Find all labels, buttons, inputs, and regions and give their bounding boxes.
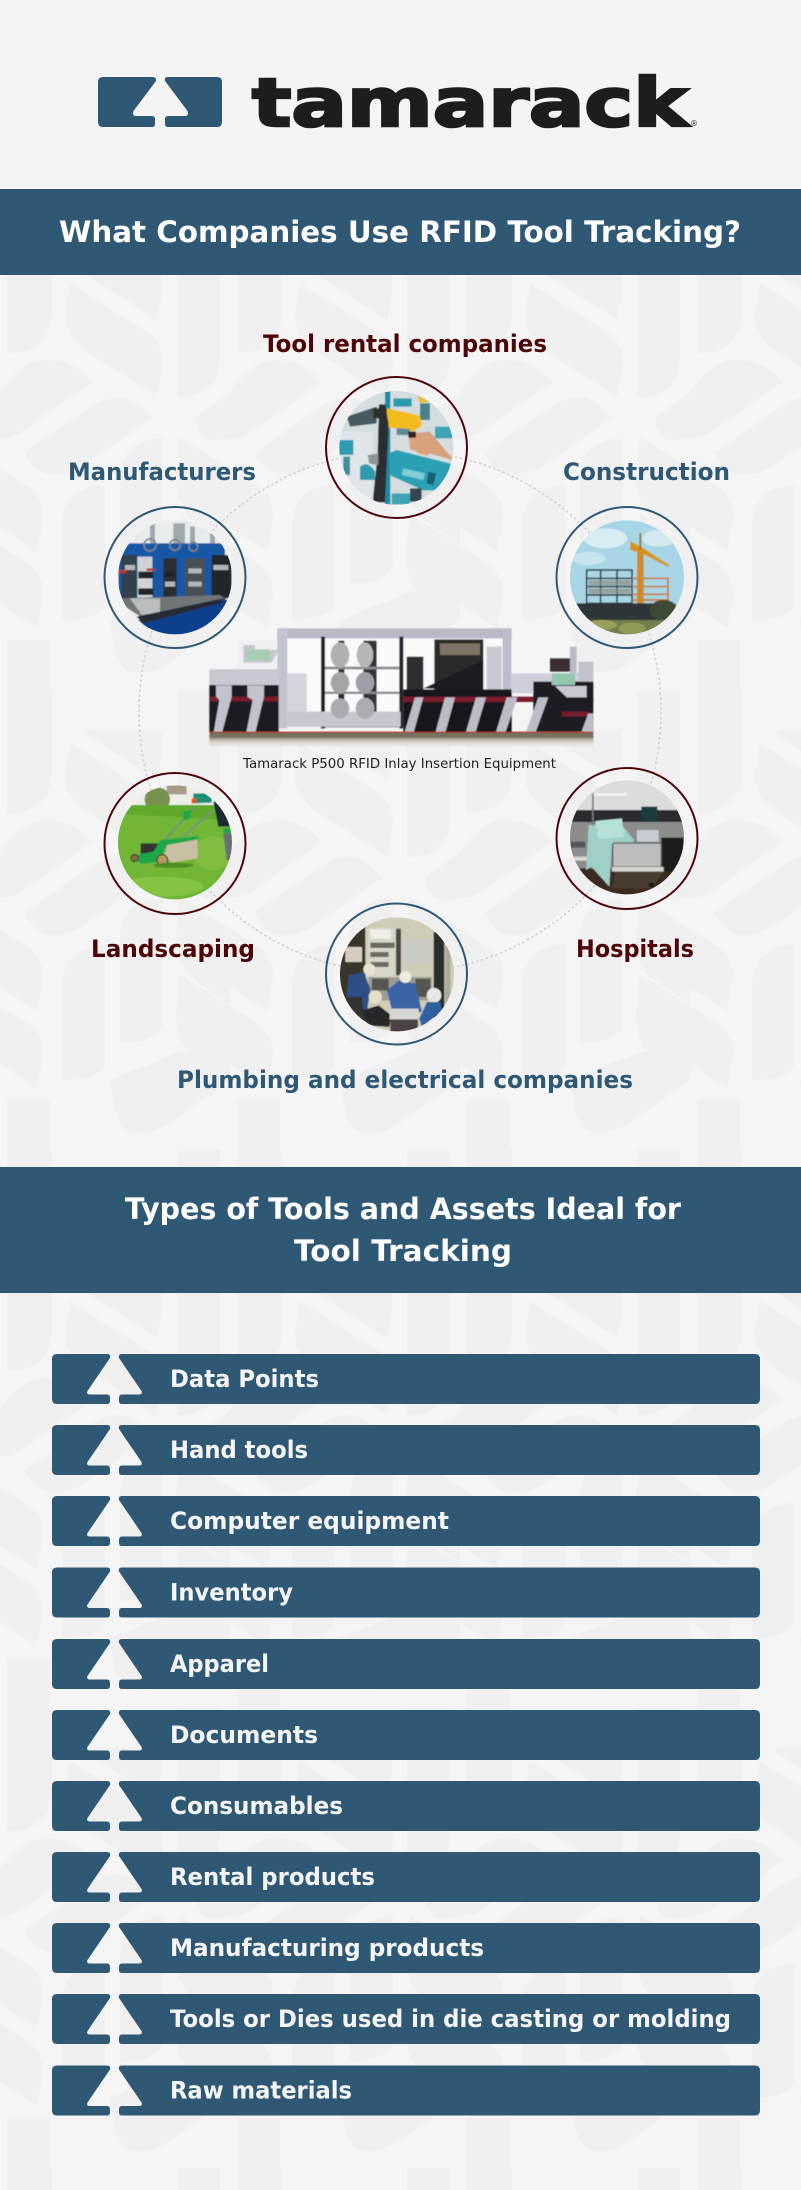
ring	[556, 768, 698, 909]
panel: manufacturers	[68, 458, 256, 648]
machine image	[209, 628, 593, 750]
list item: computer equipment	[52, 1496, 760, 1546]
ring	[556, 507, 698, 648]
photo: building under construction	[570, 520, 684, 634]
list item: inventory	[52, 1568, 760, 1618]
photo: drills	[339, 391, 454, 505]
list item: hand tools: Hand tools	[170, 1436, 308, 1464]
label: plumbing and electrical companies: Plumbing and electrical companies	[177, 1066, 633, 1094]
label: construction: Construction	[563, 458, 730, 486]
ring	[104, 773, 246, 914]
list item: documents: Documents	[170, 1721, 318, 1749]
list item: manufacturing products: Manufacturing products	[170, 1934, 484, 1962]
heading band: types of tools: Tool Tracking	[294, 1234, 512, 1268]
list item: manufacturing products	[52, 1923, 760, 1973]
photo: electricians at panel	[340, 917, 454, 1032]
list item: tools or dies: Tools or Dies used in die casting or molding	[170, 2005, 731, 2033]
list item: consumables	[52, 1781, 760, 1831]
list item: documents	[52, 1710, 760, 1760]
list item: raw materials: Raw materials	[170, 2076, 352, 2104]
list item: raw materials	[52, 2066, 760, 2116]
list item: consumables: Consumables	[170, 1792, 343, 1820]
heading band: what companies	[0, 189, 801, 275]
panel: hospitals	[556, 768, 698, 963]
ring	[326, 377, 467, 518]
list item: apparel	[52, 1639, 760, 1689]
ring	[326, 904, 467, 1044]
list item: rental products: Rental products	[170, 1863, 375, 1891]
list item: hand tools	[52, 1425, 760, 1475]
list item: apparel: Apparel	[170, 1650, 269, 1678]
heading band: types of tools: Types of Tools and Assets Ideal for	[125, 1192, 682, 1226]
heading band: types of tools	[0, 1167, 801, 1293]
list item: inventory: Inventory	[170, 1578, 293, 1606]
list item: data points	[52, 1354, 760, 1404]
list item: data points: Data Points	[170, 1365, 319, 1393]
label: hospitals: Hospitals	[576, 935, 694, 963]
list item: rental products	[52, 1852, 760, 1902]
label: tool rental companies: Tool rental companies	[263, 330, 547, 358]
panel: plumbing and electrical companies	[177, 904, 633, 1094]
label: landscaping: Landscaping	[91, 935, 255, 963]
photo: hospital bed	[570, 780, 684, 894]
registered mark: ®	[690, 119, 698, 128]
caption: Tamarack P500 RFID Inlay Insertion Equipment	[242, 756, 556, 772]
wordmark: tamarack	[252, 64, 690, 142]
panel: construction	[556, 458, 730, 648]
equipment photo with caption	[209, 628, 593, 772]
label: manufacturers: Manufacturers	[68, 458, 256, 486]
list item: tools or dies	[52, 1994, 760, 2044]
logo	[98, 64, 690, 142]
dotted orbit circle	[139, 451, 661, 973]
photo: lawn mower	[118, 785, 232, 900]
panel: tool rental companies	[263, 330, 547, 518]
photo: factory line	[118, 520, 232, 634]
list item: computer equipment: Computer equipment	[170, 1507, 449, 1535]
ring	[104, 507, 246, 648]
panel: landscaping	[91, 773, 255, 963]
icon: tamarack arrow mark	[98, 77, 222, 127]
heading band: what companies: What Companies Use RFID Tool Tracking?	[59, 215, 741, 249]
